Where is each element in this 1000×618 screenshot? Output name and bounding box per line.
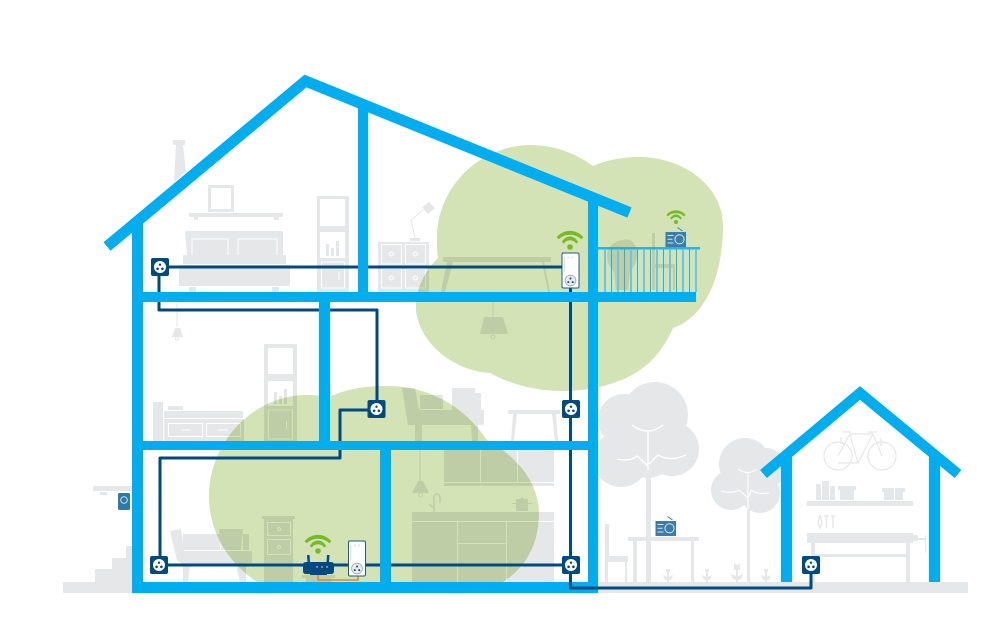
wall shelf — [189, 213, 283, 220]
railing top — [598, 247, 700, 250]
dresser — [378, 242, 429, 292]
riser cable — [569, 288, 572, 574]
icon: balcony radio — [666, 228, 686, 247]
tools — [818, 515, 835, 528]
chair — [652, 233, 675, 290]
table — [441, 257, 551, 292]
socket: middle floor centre — [368, 400, 386, 418]
outdoor trees — [593, 382, 786, 582]
sideboard — [153, 402, 163, 441]
socket: ground floor left — [150, 556, 168, 574]
router — [303, 555, 334, 575]
middle floor — [132, 441, 598, 450]
ground strip — [63, 582, 968, 593]
upper floor cable — [158, 266, 562, 268]
vise — [913, 535, 926, 553]
router stand — [302, 575, 335, 578]
socket: middle floor right — [562, 400, 580, 418]
cable to garage — [570, 574, 811, 588]
pendant lamp — [419, 450, 421, 481]
furniture: attic right room — [378, 202, 551, 339]
garage interior — [792, 396, 929, 582]
furniture: middle floor left — [153, 303, 297, 441]
garage structure — [764, 393, 958, 582]
orange ethernet cable — [318, 573, 358, 580]
large tree — [593, 382, 699, 582]
drawer cabinet — [262, 516, 295, 519]
pot — [512, 497, 532, 511]
icon: wifi signal at upper adapter — [557, 231, 583, 250]
armchair — [170, 529, 252, 582]
outdoor wall shelf — [93, 486, 132, 491]
socket: ground floor right — [562, 556, 580, 574]
icon: wifi signal at balcony radio — [666, 210, 686, 224]
furniture: balcony — [607, 233, 675, 290]
powerline adapter: upper floor — [562, 253, 579, 288]
shelf with boxes — [807, 501, 913, 506]
desk lamp — [411, 209, 424, 238]
ceiling lamp — [176, 303, 178, 327]
hanging lamp — [492, 302, 494, 317]
small tree — [711, 438, 786, 582]
right wall — [588, 198, 598, 593]
chimney lamp — [173, 140, 186, 182]
flowers — [663, 563, 771, 582]
garage left wall — [781, 456, 792, 582]
balcony railing — [598, 247, 700, 292]
stairs — [95, 546, 132, 582]
socket: garage — [802, 556, 820, 574]
left wall — [132, 222, 143, 593]
picture frame — [210, 186, 232, 210]
socket: top left — [151, 258, 169, 276]
bed — [183, 231, 286, 264]
upper floor — [132, 292, 696, 302]
white backing inside garage — [792, 396, 929, 582]
workbench — [807, 533, 913, 543]
furniture: kitchen — [412, 450, 554, 582]
furniture: middle floor right — [402, 388, 560, 441]
armchair — [402, 388, 484, 441]
garden chair — [605, 524, 628, 582]
icon: wifi signal at router — [305, 535, 331, 554]
middle post — [319, 302, 330, 441]
garage right wall — [929, 456, 940, 582]
wall cabinets — [444, 450, 554, 486]
bottom floor — [132, 582, 598, 593]
cable to ground floor — [160, 410, 376, 556]
counter — [412, 512, 554, 582]
attic post — [358, 106, 368, 292]
ground floor cable — [159, 564, 571, 566]
furniture: ground floor left — [93, 486, 335, 582]
icon: garden radio — [656, 516, 676, 536]
plant — [607, 240, 637, 290]
roof — [107, 81, 630, 246]
powerline adapter: ground floor — [348, 541, 366, 576]
bicycle — [824, 432, 896, 470]
faucet — [430, 494, 440, 512]
house structure — [107, 81, 696, 593]
coverage area: lower wifi cloud — [209, 386, 539, 582]
cable between floors — [159, 276, 377, 400]
garage roof — [764, 393, 958, 474]
bookcase — [264, 344, 297, 441]
icon: wall thermostat — [118, 493, 130, 510]
balusters — [605, 249, 696, 292]
garden table — [628, 537, 699, 582]
side table — [508, 410, 560, 441]
furniture: bedroom attic — [173, 140, 349, 292]
lower post — [380, 450, 391, 582]
coverage area: upper wifi cloud — [416, 145, 723, 391]
cable network — [158, 267, 571, 574]
bookcase — [317, 196, 349, 292]
